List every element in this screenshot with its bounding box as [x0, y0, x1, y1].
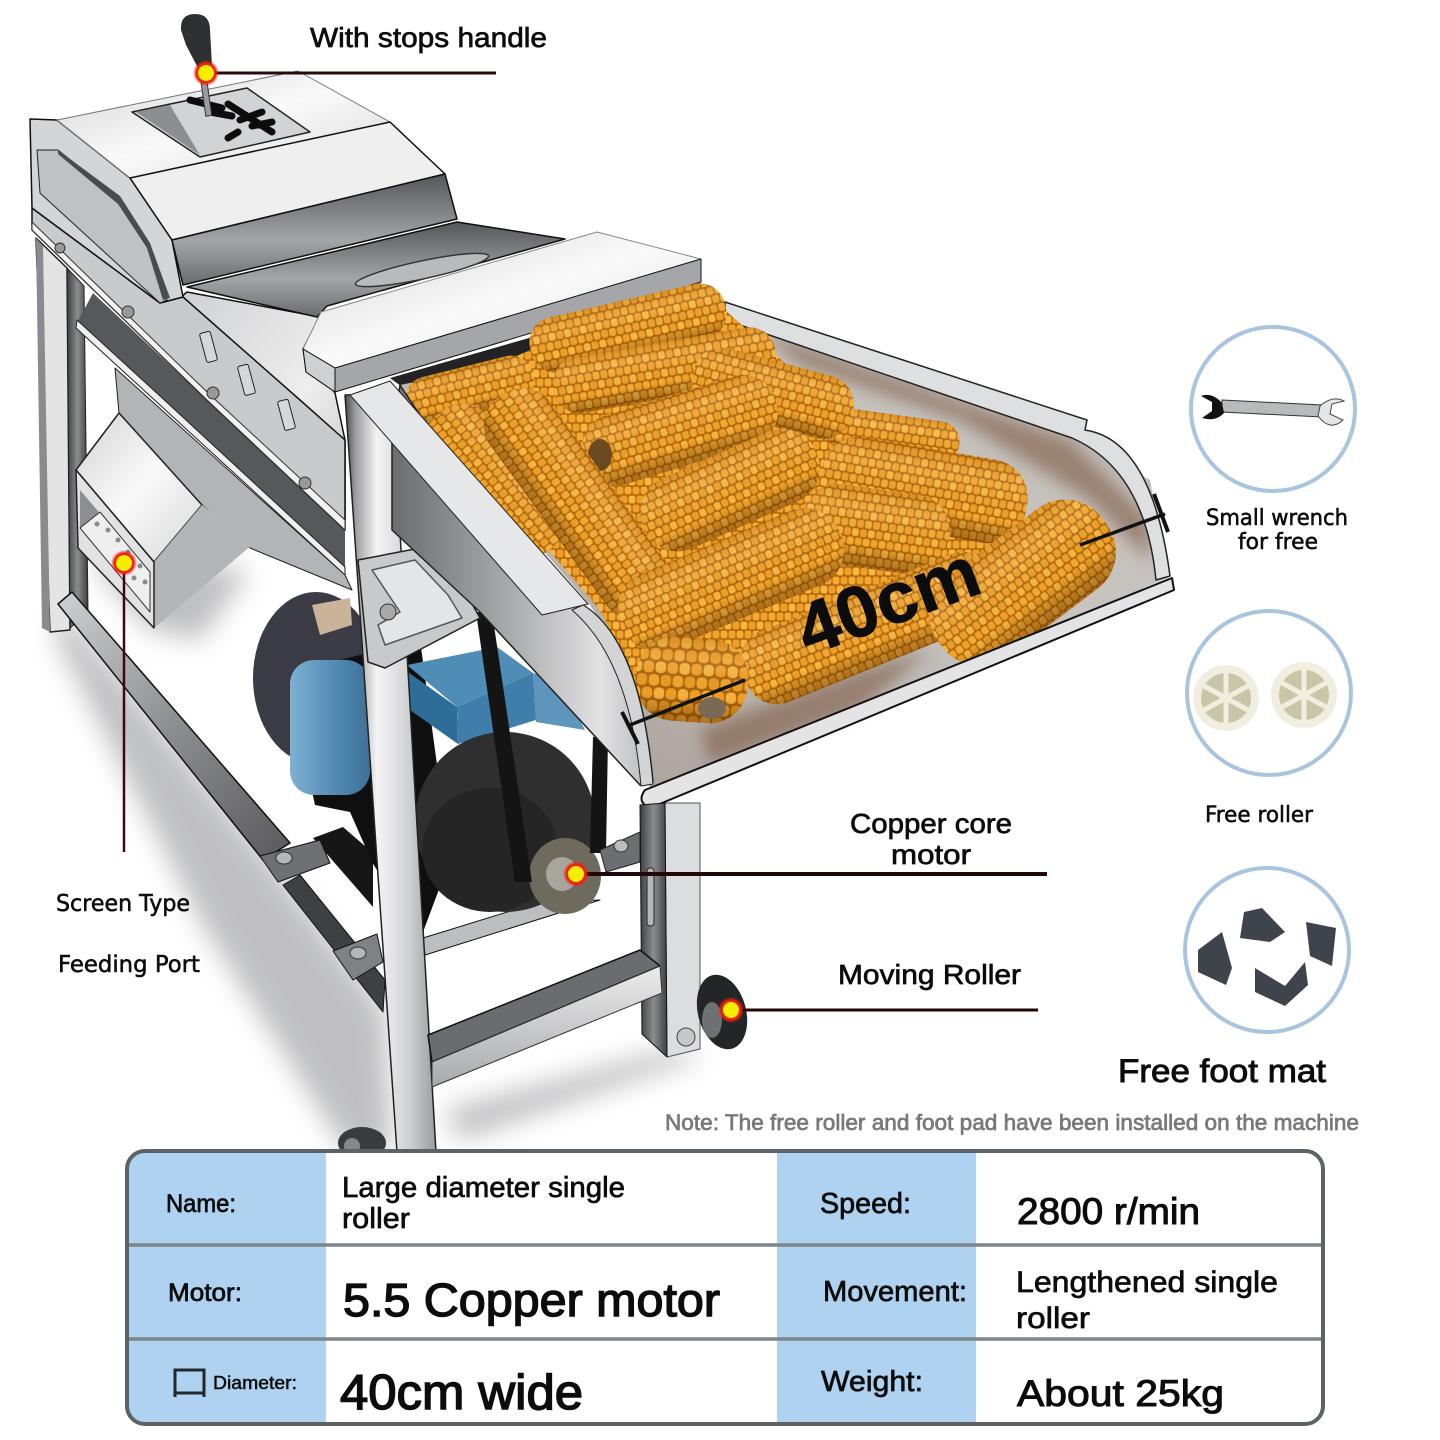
moving roller wheel — [689, 969, 755, 1055]
row: speed: Speed: — [820, 1188, 911, 1220]
tray left curved edge — [572, 605, 653, 786]
accessory: free roller — [1187, 611, 1351, 828]
icon: wrench — [1201, 395, 1344, 425]
row: name: roller — [342, 1203, 410, 1235]
callout: with stops handle — [193, 22, 547, 86]
row: name: Large diameter single — [342, 1172, 625, 1204]
callout: moving roller — [718, 959, 1038, 1023]
dark opening below cap — [390, 336, 540, 400]
rear wheel — [338, 1127, 386, 1159]
pulley — [529, 838, 601, 914]
floor shadow under machine — [52, 560, 705, 1150]
drive belt — [476, 612, 532, 882]
corn pile — [401, 278, 1134, 726]
accessory: small wrench: Small wrench — [1206, 506, 1348, 531]
callout: screen type feeding port — [56, 550, 200, 978]
row: name — [166, 1172, 625, 1235]
blue capacitor — [290, 660, 370, 795]
tray side panel — [392, 385, 653, 785]
tray back wall rim — [725, 302, 1170, 580]
cob end — [588, 439, 612, 471]
row: motor: Motor: — [168, 1279, 242, 1307]
row: weight: About 25kg — [1017, 1373, 1224, 1414]
tray front lip — [641, 578, 1174, 808]
row: speed: 2800 r/min — [1017, 1191, 1200, 1232]
callout: with stops handle: With stops handle — [310, 22, 547, 53]
row: speed — [820, 1188, 1200, 1232]
lower cross bar — [428, 950, 662, 1087]
tray floor reflections — [700, 330, 1150, 765]
front left leg with bracket — [345, 395, 480, 1152]
shift plate with slot — [132, 88, 310, 157]
callout: moving roller: Moving Roller — [838, 959, 1021, 990]
upper housing — [30, 71, 457, 303]
tray rim highlight — [350, 381, 588, 615]
accessory: small wrench — [1191, 327, 1355, 555]
row: weight: Weight: — [821, 1366, 923, 1398]
row: diameter — [175, 1366, 583, 1420]
rear right leg — [640, 803, 700, 1057]
specification table — [127, 1151, 1323, 1424]
accessory: free foot mat — [1118, 868, 1349, 1089]
back left leg — [36, 238, 88, 632]
machine: thresher body — [30, 14, 1174, 1159]
row: name: Name: — [166, 1190, 236, 1218]
row: motor — [168, 1274, 720, 1326]
callout: screen type feeding port: Screen Type — [56, 891, 190, 917]
accessory: small wrench: for free — [1238, 530, 1318, 555]
motor end cap — [253, 592, 379, 764]
feeding port hopper — [76, 413, 252, 628]
motor mount bar — [423, 900, 600, 955]
callout: screen type feeding port: Feeding Port — [58, 952, 200, 978]
row: movement: Movement: — [823, 1276, 967, 1308]
rear bracket — [600, 832, 640, 872]
corn tray floor — [400, 318, 1168, 790]
corn backing — [420, 310, 1015, 690]
icon: two rollers — [1193, 662, 1337, 731]
row: motor: 5.5 Copper motor — [343, 1274, 720, 1326]
callout: copper core motor: Copper core — [850, 808, 1012, 839]
main side plate and rail — [32, 208, 352, 590]
accessory: free foot mat: Free foot mat — [1118, 1053, 1326, 1089]
motor nameplate — [312, 598, 352, 635]
callout: copper core motor — [563, 808, 1047, 887]
40cm width dimension: 40cm — [786, 532, 990, 671]
gear vent oval — [354, 247, 490, 293]
callout: copper core motor: motor — [891, 839, 971, 870]
row: weight — [821, 1366, 1224, 1414]
row: diameter: Diameter: — [213, 1373, 297, 1393]
cob end — [698, 697, 726, 719]
installation note: Note: The free roller and foot pad have been installed on the machine — [665, 1110, 1359, 1135]
stop handle — [181, 14, 212, 116]
hopper cap — [303, 232, 701, 392]
icon: foot mats — [1198, 908, 1336, 1006]
accessory: free roller: Free roller — [1205, 803, 1314, 828]
flat chute top — [187, 222, 565, 317]
lower frame rail — [58, 592, 385, 1012]
icon: diameter frame — [175, 1370, 204, 1397]
row: movement: roller — [1016, 1302, 1090, 1335]
motor dark body — [297, 640, 450, 940]
row: movement — [823, 1266, 1278, 1335]
motor assembly — [253, 592, 640, 955]
cast iron housing — [415, 732, 595, 912]
40cm width dimension — [622, 494, 1168, 744]
row: diameter: 40cm wide — [340, 1366, 583, 1420]
blue junction box — [405, 647, 585, 744]
row: movement: Lengthened single — [1016, 1266, 1278, 1299]
